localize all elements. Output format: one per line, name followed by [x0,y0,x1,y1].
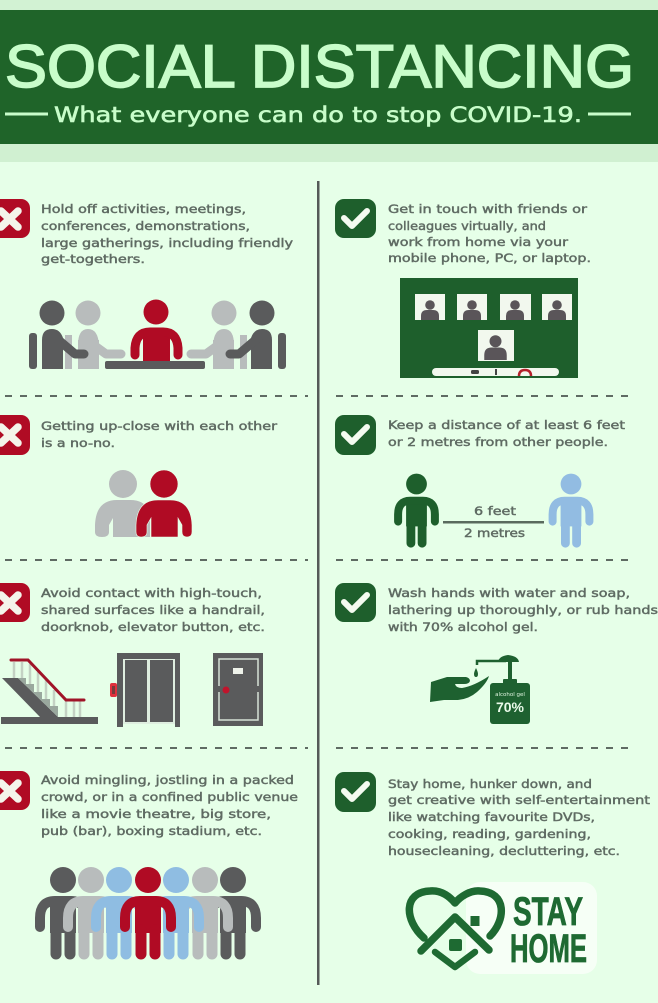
text: avoid mingling [41,773,298,838]
panel: keep a distance [335,415,626,543]
illustration: hand and sanitizer bottle [430,655,530,724]
illustration: meeting at a table [29,300,286,369]
illustration: two people close together [95,470,192,537]
text: wash hands: lathering up thoroughly, or rub hands [388,603,658,617]
icon: red cross [0,583,30,622]
icon: heart with house [409,891,501,967]
text: avoid mingling: Avoid mingling, jostling in a packed [41,773,294,787]
text: hold off activities [41,202,293,266]
text: wash hands: Wash hands with water and soap, [388,586,630,600]
panel: stay home [335,772,651,974]
text: avoid mingling: crowd, or in a confined public venue [41,790,298,804]
subtitle: What everyone can do to stop COVID-19. [54,103,582,127]
icon: green check [335,199,376,238]
text: getting up-close: Getting up-close with each other [41,419,277,433]
illustration: staircase [1,660,98,724]
text: hold off activities: conferences, demonstrations, [41,219,250,233]
center divider [317,181,320,985]
icon: red cross [0,771,30,810]
panel: no up-close contact [0,415,277,537]
panel: don't hold gatherings [0,199,293,369]
icon: green check [335,772,376,812]
illustration: door with knob [213,653,263,726]
text: avoid contact: doorknob, elevator button, etc. [41,620,265,634]
text: stay home: like watching favourite DVDs, [388,810,595,824]
text: get in touch [388,202,591,265]
text: wash hands: with 70% alcohol gel. [388,620,538,634]
text: stay home wordmark: STAY [513,890,583,934]
text: getting up-close: is a no-no. [41,436,115,450]
illustration: hand and sanitizer bottle: alcohol gel [495,692,525,698]
text: stay home [388,777,651,858]
section dividers [5,396,634,748]
text: hold off activities: get-togethers. [41,252,145,266]
text: stay home: cooking, reading, gardening, [388,827,591,841]
panel: avoid crowds [0,771,298,954]
illustration: two people 6 feet apart: 2 metres [464,526,525,540]
icon: green check [335,583,376,622]
illustration: hand and sanitizer bottle: 70% [496,699,525,715]
text: get in touch: colleagues virtually, and [388,219,546,233]
text: get in touch: work from home via your [388,235,568,249]
text: avoid contact: shared surfaces like a handrail, [41,603,265,617]
illustration: elevator [110,653,180,727]
text: keep a distance: Keep a distance of at least 6 feet [388,418,626,432]
text: stay home wordmark: HOME [510,927,587,971]
text: stay home: Stay home, hunker down, and [388,777,592,791]
icon: red cross [0,199,30,238]
text: stay home wordmark [510,890,587,971]
illustration: two people 6 feet apart [398,474,589,543]
header banner [0,0,658,162]
text: hold off activities: large gatherings, including friendly [41,236,293,250]
panel: avoid high-touch surfaces [0,583,265,727]
text: stay home: get creative with self-entertainment [388,793,651,807]
text: keep a distance: or 2 metres from other people. [388,435,608,449]
text: avoid contact: Avoid contact with high-touch, [41,586,262,600]
illustration: video call screen [400,278,578,378]
text: hold off activities: Hold off activities, meetings, [41,202,246,216]
text: avoid mingling: like a movie theatre, big store, [41,807,271,821]
text: getting up-close [41,419,277,450]
subtitle [5,103,631,127]
illustration: two people 6 feet apart: 6 feet [474,504,517,518]
text: avoid mingling: pub (bar), boxing stadium, etc. [41,824,262,838]
text: stay home: housecleaning, decluttering, etc. [388,844,620,858]
logo: stay home [409,882,597,974]
text: wash hands [388,586,658,634]
text: get in touch: mobile phone, PC, or laptop. [388,251,591,265]
icon: green check [335,415,376,455]
icon: red cross [0,415,30,455]
title: SOCIAL DISTANCING [5,33,634,100]
text: avoid contact [41,586,265,634]
text: get in touch: Get in touch with friends or [388,202,587,216]
panel: stay connected virtually [335,199,591,378]
illustration: crowd of people [40,867,256,954]
text: keep a distance [388,418,626,449]
panel: wash hands [335,583,658,724]
